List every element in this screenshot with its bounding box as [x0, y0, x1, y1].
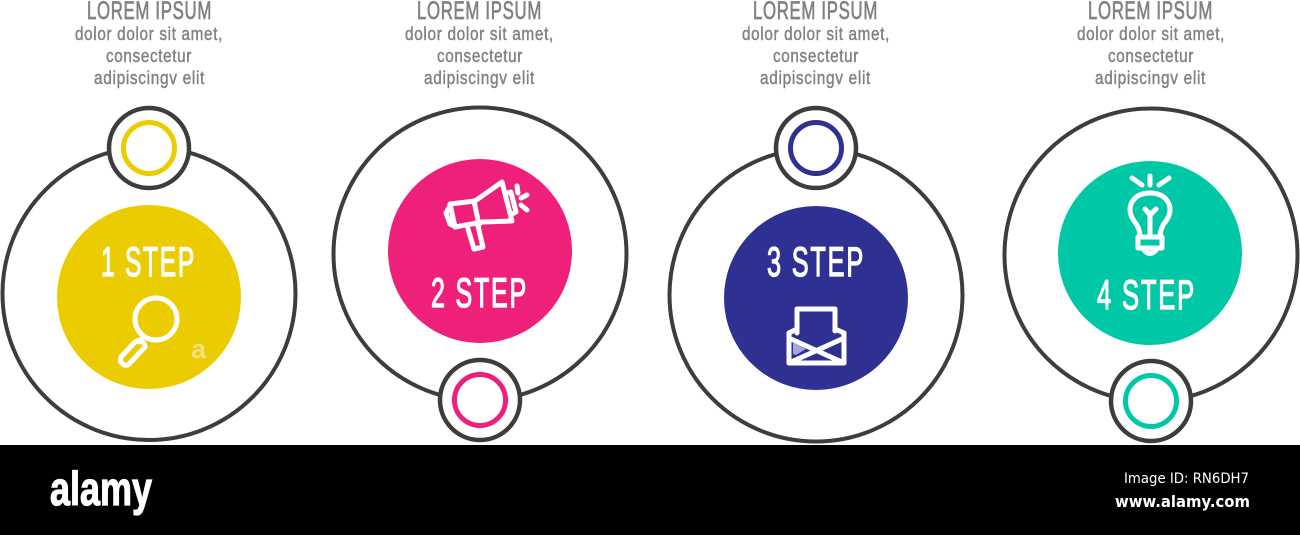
step 3 description	[742, 23, 890, 88]
step 3 colored disc	[724, 206, 908, 390]
panel: step 2	[334, 0, 626, 440]
step 3 description: dolor dolor sit amet,	[742, 23, 890, 44]
step 4 description: consectetur	[1108, 45, 1194, 66]
step 1 label: 1 STEP	[101, 238, 196, 285]
step 3 description: adipiscingv elit	[760, 67, 871, 88]
step 2 description: adipiscingv elit	[424, 67, 535, 88]
step 4 description	[1077, 23, 1225, 88]
step 1 outer ring	[2, 147, 296, 440]
icon: magnifying glass	[120, 298, 177, 365]
icon: light bulb	[1130, 176, 1170, 254]
footer bar	[0, 445, 1300, 535]
step 2 colored disc	[388, 159, 572, 343]
logo: alamy: alamy	[50, 462, 152, 515]
image id: Image ID: RN6DH7	[1124, 471, 1249, 487]
step 3 label: 3 STEP	[767, 238, 865, 285]
step 3 description: consectetur	[773, 45, 859, 66]
step 4 small node	[1111, 361, 1191, 441]
step 1 description: consectetur	[106, 45, 192, 66]
step 1 small node	[109, 108, 189, 188]
icon: open envelope	[789, 309, 844, 363]
step 1 description: dolor dolor sit amet,	[75, 23, 223, 44]
step 4 description: dolor dolor sit amet,	[1077, 23, 1225, 44]
panel: step 1	[2, 0, 296, 440]
panel: step 4	[1004, 0, 1298, 441]
step 2 outer ring	[334, 108, 626, 400]
panel: step 3	[670, 0, 962, 442]
step 2 description: consectetur	[437, 45, 523, 66]
step 2 description	[405, 23, 554, 88]
step 2 label: 2 STEP	[431, 269, 528, 316]
step 3 small node	[776, 108, 856, 188]
step 4 outer ring	[1004, 108, 1298, 402]
watermark fragment: a	[191, 334, 207, 364]
website: www.alamy.com	[1115, 492, 1250, 511]
step 4 label: 4 STEP	[1097, 271, 1196, 318]
step 4 colored disc	[1058, 161, 1242, 345]
icon: megaphone	[446, 182, 527, 249]
step 3 outer ring	[670, 148, 962, 442]
step 2 description: dolor dolor sit amet,	[405, 23, 554, 44]
step 4 description: adipiscingv elit	[1095, 67, 1206, 88]
step 1 colored disc	[57, 205, 241, 389]
step 1 description: adipiscingv elit	[94, 67, 205, 88]
watermark fragment	[793, 342, 806, 355]
step 2 small node	[440, 360, 520, 440]
step 1 description	[75, 23, 223, 88]
